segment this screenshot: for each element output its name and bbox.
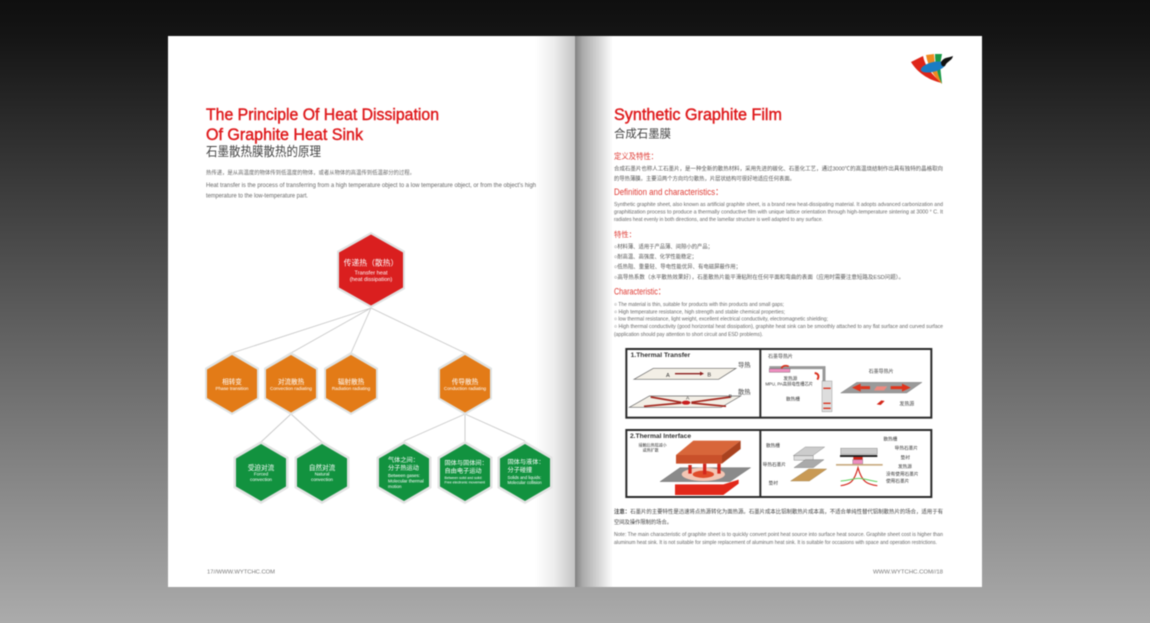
text block: note Chinese: [614, 508, 943, 526]
diagram: thermal interface: 导热石墨片: [895, 444, 918, 451]
text block: characteristics Chinese: ○高导热系数（水平散热效果好），石墨散热片能平滑粘附在任何平面和弯曲的表面（应用时需要注意短路及ESD问题）。: [614, 273, 904, 281]
text block: definition English: graphitization process to produce a thermally conductive film with unique lattice orientation through high-temperature sintering at 3000 ° C. It: [614, 210, 944, 216]
diagram: thermal interface: 没有使用石墨片: [886, 470, 919, 477]
text block: characteristics Chinese: ○材料薄、适用于产品薄、间隙小的产品；: [614, 242, 713, 250]
text block: note English: [614, 532, 943, 546]
heading: left title: [206, 106, 439, 144]
diagram: thermal transfer: 散热槽: [786, 395, 800, 402]
node: solid and liquid: Solids and liquids:: [508, 475, 541, 480]
node: solid and liquid: 固体与液体：: [508, 458, 545, 466]
diagram: thermal transfer: MPU, PA高频电性槽芯片: [765, 380, 813, 387]
node: between gases: Molecular thermal: [388, 478, 424, 484]
node: forced convection: Forced: [254, 472, 269, 476]
text block: characteristics Chinese: [614, 229, 904, 281]
text block: characteristics English: (application should pay attention to short circuit and ESD problems).: [614, 332, 763, 338]
text block: characteristics Chinese: 特性：: [614, 229, 636, 239]
node: convection: Convection radiating: [270, 386, 312, 391]
text block: definition Chinese: 的导热薄膜。主要沿两个方向均匀散热，片层状结构可很好地适应任何表面。: [614, 174, 795, 182]
text block: characteristics English: ○ High thermal conductivity (good horizontal heat dissipation), graphite heat sink can be smoothly attached to any flat surface and curved surface: [614, 324, 943, 330]
text block: definition Chinese: [614, 151, 943, 182]
node: between gases: [376, 441, 432, 504]
diagram: thermal interface: 接触后热阻减小: [639, 441, 667, 447]
node: natural convection: [294, 441, 350, 504]
heading: left title: The Principle Of Heat Dissipation: [206, 106, 439, 124]
node: conduction: 传导散热: [452, 377, 479, 386]
node: transfer heat: [337, 232, 405, 308]
node: natural convection: Natural: [315, 472, 329, 476]
text block: characteristics Chinese: ○耐高温、高强度、化学性能稳定；: [614, 252, 697, 260]
node: convection: [264, 352, 318, 415]
diagram: thermal interface: 使用石墨片: [886, 477, 910, 484]
text block: note English: Note: The main characteristic of graphite sheet is to quickly convert point heat source into surface heat source. Graphite sheet cost is higher than: [614, 532, 943, 538]
panel: right page: [575, 36, 982, 587]
node: solid and liquid: 分子碰撞: [508, 466, 532, 474]
diagram: thermal interface: 散热槽: [883, 436, 898, 443]
text block: definition English: radiates heat evenly in both directions, and the lamellar structure is well adapted to any surface.: [614, 217, 823, 223]
node: between gases: 气体之间：: [388, 456, 419, 464]
node: phase transition: [205, 352, 259, 415]
diagram: thermal interface: 垫衬: [901, 454, 910, 460]
text block: characteristics English: ○ The material is thin, suitable for products with thin products and small gaps;: [614, 302, 784, 308]
node: between gases: motion: [388, 484, 402, 489]
node: conduction: Conduction radiating: [444, 386, 487, 391]
node: between solids: 自由电子运动: [444, 467, 482, 475]
diagram: thermal interface: 2.Thermal Interface: [630, 433, 691, 440]
footer: right page number: WWW.WYTCHC.COM//18: [873, 570, 943, 576]
diagram: thermal interface: 发热源: [898, 463, 912, 470]
text block: characteristics English: Characteristic：: [614, 286, 665, 296]
diagram: thermal interface: [626, 430, 931, 497]
text block: definition Chinese: 合成石墨片也称人工石墨片，是一种全新的散热材料，采用先进的碳化、石墨化工艺，通过3000℃的高温烧结制作出具有独特的晶格取向: [614, 164, 943, 172]
diagram: thermal transfer: A: [686, 396, 690, 402]
node: between solids: 固体与固体间：: [444, 459, 488, 467]
text block: note Chinese: 注意：石墨片的主要特性是迅速将点热源转化为面热源。石墨片成本比铝制散热片成本高，不适合单纯性替代铝制散热片的场合，适用于有: [614, 508, 943, 516]
node: phase transition: 相转变: [222, 377, 242, 386]
node: between solids: Free electronic movement: [444, 480, 485, 484]
node: convection: 对流散热: [278, 377, 305, 386]
diagram: thermal interface: 导热石墨片: [763, 461, 786, 468]
diagram: thermal interface: 或热扩散: [643, 447, 659, 453]
node: radiation: Radiation radiating: [332, 386, 371, 391]
panel: left page: [168, 36, 575, 587]
node: forced convection: convection: [250, 477, 272, 482]
text block: heat transfer intro: 热传递，是从高温度的物体传到低温度的物体，或者从物体的高温传到低温部分的过程。: [206, 168, 415, 176]
text block: note Chinese: 空间及操作限制的场合。: [614, 518, 672, 526]
diagram: thermal interface: 散热槽: [766, 442, 780, 449]
node: solid and liquid: Molecular collision: [508, 480, 542, 485]
node: forced convection: 受迫对流: [248, 463, 275, 472]
diagram: thermal transfer: A: [666, 373, 670, 379]
text block: heat transfer intro: Heat transfer is the process of transferring from a high temperature object to a low temperature object, or from the object's high: [206, 183, 536, 189]
heading: right Chinese subtitle: 合成石墨膜: [614, 126, 671, 140]
node: radiation: [324, 352, 378, 415]
icon: logo: [911, 54, 953, 84]
diagram: thermal transfer: 石墨导热片: [869, 368, 894, 375]
diagram: thermal interface: 垫衬: [769, 479, 778, 485]
text block: characteristics Chinese: ○低热阻、重量轻、导电性能优异、有电磁屏蔽作用；: [614, 262, 741, 270]
node: between solids: [438, 441, 492, 504]
text block: definition English: Synthetic graphite sheet, also known as artificial graphite sheet, is a brand new heat-dissipating material. It adopts advanced carbonization and: [614, 202, 943, 208]
node: radiation: 辐射散热: [338, 377, 365, 386]
text block: characteristics English: ○ low thermal resistance, light weight, excellent electrical conductivity, electromagnetic shielding;: [614, 316, 828, 322]
node: between solids: Between solid and solid:: [444, 476, 482, 480]
text block: note English: aluminum heat sink. It is not suitable for simple replacement of aluminum heat sink. It is suitable for occasions with space and operation restrictions.: [614, 540, 937, 546]
node: transfer heat: (heat dissipation): [350, 277, 392, 283]
diagram: thermal transfer: 1.Thermal Transfer: [631, 352, 691, 359]
text block: heat transfer intro: temperature to the low-temperature part.: [206, 194, 308, 200]
diagram: thermal transfer: 发热源: [899, 400, 914, 407]
node: conduction: [438, 352, 492, 415]
diagram: thermal transfer: 导热: [738, 360, 751, 369]
node: solid and liquid: [498, 441, 552, 504]
heading: left title: Of Graphite Heat Sink: [206, 126, 364, 144]
diagram: thermal transfer: [626, 349, 931, 418]
node: between gases: Between gases:: [388, 473, 420, 478]
node: natural convection: convection: [311, 477, 333, 482]
text block: definition English: Definition and characteristics：: [614, 187, 723, 197]
node: forced convection: [234, 441, 288, 504]
heading: right title: Synthetic Graphite Film: [614, 106, 782, 124]
diagram: thermal transfer: 散热: [738, 387, 751, 396]
node: phase transition: Phase transition: [216, 386, 249, 391]
heading: left Chinese subtitle: 石墨散热膜散热的原理: [206, 144, 321, 159]
chart: heat dissipation tree connectors: [232, 308, 525, 442]
node: between gases: 分子热运动: [388, 464, 419, 472]
text block: characteristics English: ○ High temperature resistance, high strength and stable chemical properties;: [614, 310, 785, 316]
node: transfer heat: 传递热（散热）: [344, 258, 398, 268]
footer: left page number: 17//WWW.WYTCHC.COM: [207, 570, 276, 576]
diagram: thermal transfer: B: [729, 394, 733, 400]
text block: characteristics English: [614, 286, 943, 338]
diagram: thermal transfer: 发热源: [783, 375, 798, 382]
node: transfer heat: Transfer heat: [354, 270, 388, 276]
diagram: thermal transfer: B: [707, 372, 711, 378]
text block: heat transfer intro: [206, 168, 536, 200]
book spread: [168, 36, 982, 587]
diagram: thermal transfer: 石墨导热片: [768, 353, 793, 360]
text block: definition English: [614, 187, 944, 223]
text block: definition Chinese: 定义及特性：: [614, 151, 658, 161]
node: natural convection: 自然对流: [309, 463, 336, 472]
